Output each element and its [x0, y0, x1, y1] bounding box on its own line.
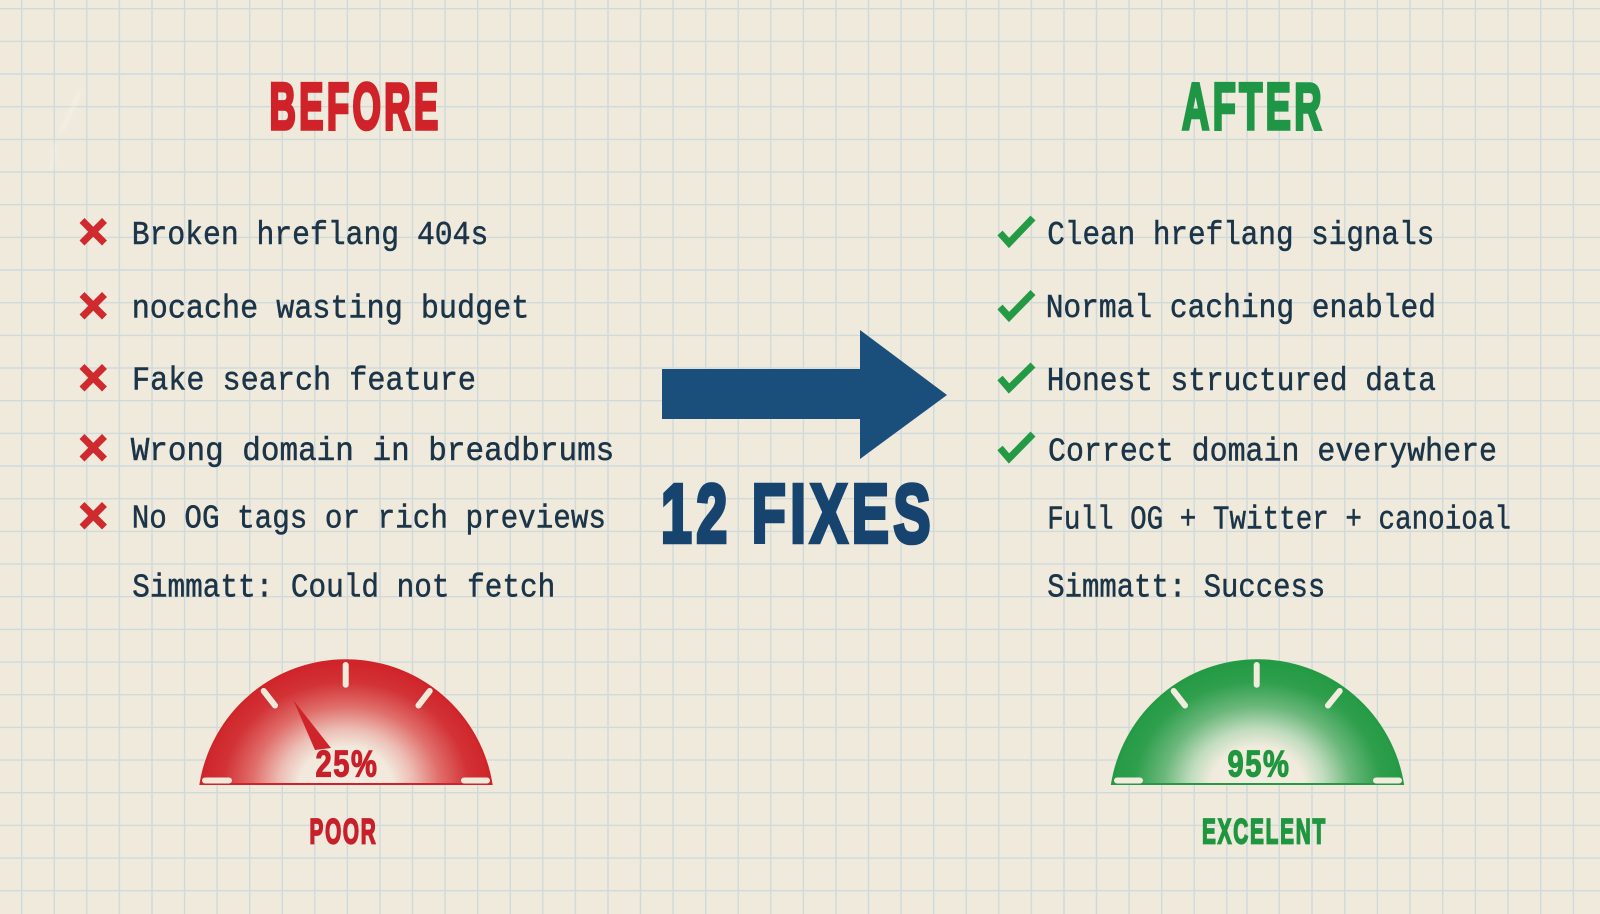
- gauge value: 25%: [316, 744, 378, 785]
- heading: BEFORE: BEFORE: [270, 69, 442, 143]
- panel: before: [82, 69, 614, 852]
- icon: red cross row 2: [82, 294, 104, 317]
- heading: AFTER: AFTER: [1182, 69, 1325, 143]
- text: wrong domain: Wrong domain in breadbrums: [131, 433, 614, 470]
- text: full og twitter canonical: Full OG + Twitter + canoioal: [1047, 501, 1511, 538]
- icon: red cross row 4: [82, 436, 104, 459]
- icon: green check row 4: [1000, 434, 1033, 458]
- list: before issues: [82, 217, 614, 607]
- icon: red cross row 1: [82, 220, 104, 243]
- gauge: poor 25%: [200, 660, 492, 852]
- text: simmatt could not fetch: Simmatt: Could not fetch: [132, 570, 555, 607]
- text: no og tags: No OG tags or rich previews: [132, 501, 606, 538]
- text: broken hreflang: Broken hreflang 404s: [132, 217, 488, 254]
- gauge: excellent 95%: [1112, 660, 1403, 852]
- gauge label: POOR: [310, 812, 378, 852]
- gauge dial: [200, 660, 492, 784]
- text: clean hreflang: Clean hreflang signals: [1047, 217, 1434, 254]
- icon: red cross row 5: [82, 504, 104, 527]
- panel: after: [1000, 69, 1511, 852]
- text: nocache: nocache wasting budget: [132, 290, 529, 327]
- text: correct domain: Correct domain everywhere: [1048, 434, 1497, 471]
- gauge dial: [1112, 660, 1403, 784]
- text: normal caching: Normal caching enabled: [1046, 290, 1436, 327]
- icon: red cross row 3: [82, 366, 104, 389]
- gauge ticks: [1117, 665, 1399, 780]
- text: honest structured data: Honest structured data: [1047, 363, 1436, 400]
- gauge label: EXCELENT: [1202, 812, 1327, 852]
- icon: green check row 3: [1000, 365, 1033, 388]
- icon: green check row 2: [1000, 292, 1033, 317]
- gauge needle: [293, 700, 331, 750]
- text: simmatt success: Simmatt: Success: [1047, 570, 1325, 607]
- gauge value: 95%: [1228, 744, 1290, 785]
- gauge ticks: [205, 665, 487, 780]
- arrow: before to after: [662, 330, 947, 459]
- icon: green check row 1: [1000, 218, 1033, 243]
- label: 12 fixes: 12 FIXES: [661, 467, 935, 560]
- text: fake search: Fake search feature: [132, 362, 476, 399]
- list: after improvements: [1000, 217, 1511, 607]
